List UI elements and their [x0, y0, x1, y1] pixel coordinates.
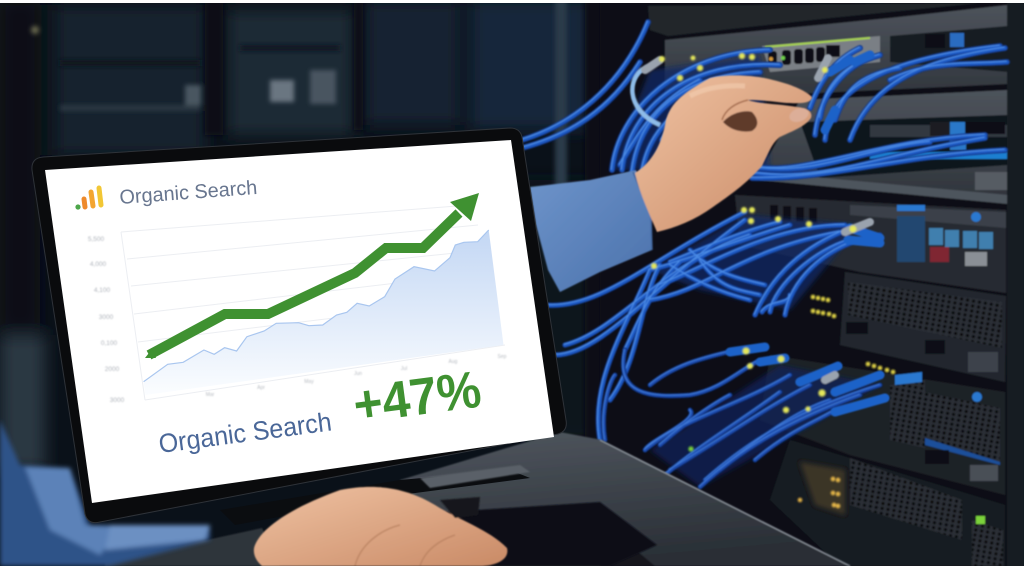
keyboard: [105, 502, 657, 566]
x axis labels: May: [304, 379, 314, 385]
cable shadow mass: [610, 55, 880, 487]
server rack: [600, 0, 1024, 570]
rack top unit: [648, 3, 980, 36]
left foreground sleeve: [0, 420, 210, 566]
shirt sleeve: [530, 170, 652, 292]
mesh unit six: [770, 440, 1005, 566]
y axis labels: 4,000: [90, 261, 107, 268]
chart gridlines and area: [121, 205, 505, 400]
laptop monitor: [32, 128, 566, 525]
x axis labels: Apr: [257, 385, 265, 391]
hand: [635, 75, 812, 232]
logo bars: [75, 188, 101, 210]
y axis labels: [88, 236, 125, 404]
y axis labels: 5,500: [88, 236, 105, 243]
screen footer label: Organic Search: [157, 406, 333, 459]
typing hand: [254, 487, 507, 566]
rack right post: [1007, 0, 1024, 570]
x axis labels: [206, 354, 507, 398]
x axis labels: Mar: [206, 392, 215, 398]
thumb nail: [787, 105, 811, 125]
x axis labels: Sep: [498, 354, 507, 360]
y axis labels: 3000: [99, 314, 114, 321]
desk surface: [400, 432, 850, 566]
switch unit three: [735, 195, 1006, 293]
x axis labels: Jul: [401, 366, 407, 372]
x axis labels: Aug: [449, 359, 458, 365]
monitor bezel: [32, 128, 566, 523]
switch unit one: [665, 5, 1008, 100]
screen: [45, 140, 554, 503]
blue network cables: [521, 21, 1007, 487]
+47% stat: +47%: [350, 361, 484, 435]
green growth arrow: [145, 193, 479, 358]
screen heading: Organic Search: [119, 177, 258, 209]
y axis labels: 3000: [110, 397, 125, 404]
finger gap: [723, 111, 757, 132]
arm and hand reaching for cables: [530, 75, 812, 292]
y axis labels: 4,100: [94, 287, 111, 294]
monitor stand: [220, 470, 530, 525]
y axis labels: 0,100: [101, 340, 118, 347]
x axis labels: Jun: [354, 371, 362, 377]
y axis labels: 2000: [105, 366, 120, 373]
switch unit two: [760, 90, 1008, 200]
mesh unit four: [840, 272, 1006, 382]
mesh unit five: [760, 355, 1005, 495]
